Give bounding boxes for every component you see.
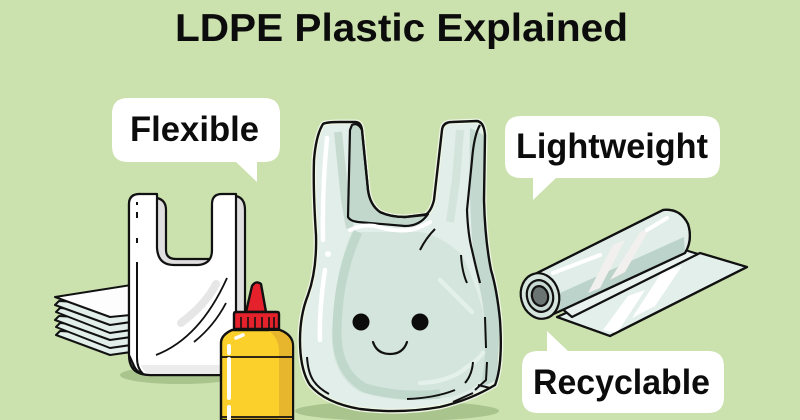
callout: Flexible: Flexible: [130, 110, 259, 149]
icon: smiling face: [352, 314, 428, 354]
icon: yellow bottle: [221, 282, 293, 420]
callout: Flexible: [112, 98, 280, 182]
callout: Recyclable: Recyclable: [533, 363, 710, 402]
icon: film roll: [516, 210, 747, 336]
title: LDPE Plastic Explained: [175, 7, 628, 50]
callout: Lightweight: [505, 116, 720, 200]
icon: big smiling bag: [295, 121, 501, 420]
callout: Lightweight: Lightweight: [516, 127, 708, 166]
icon: stack of flat bags: [55, 285, 131, 355]
callout: Recyclable: [522, 331, 724, 413]
icon: white bag: [120, 194, 245, 384]
